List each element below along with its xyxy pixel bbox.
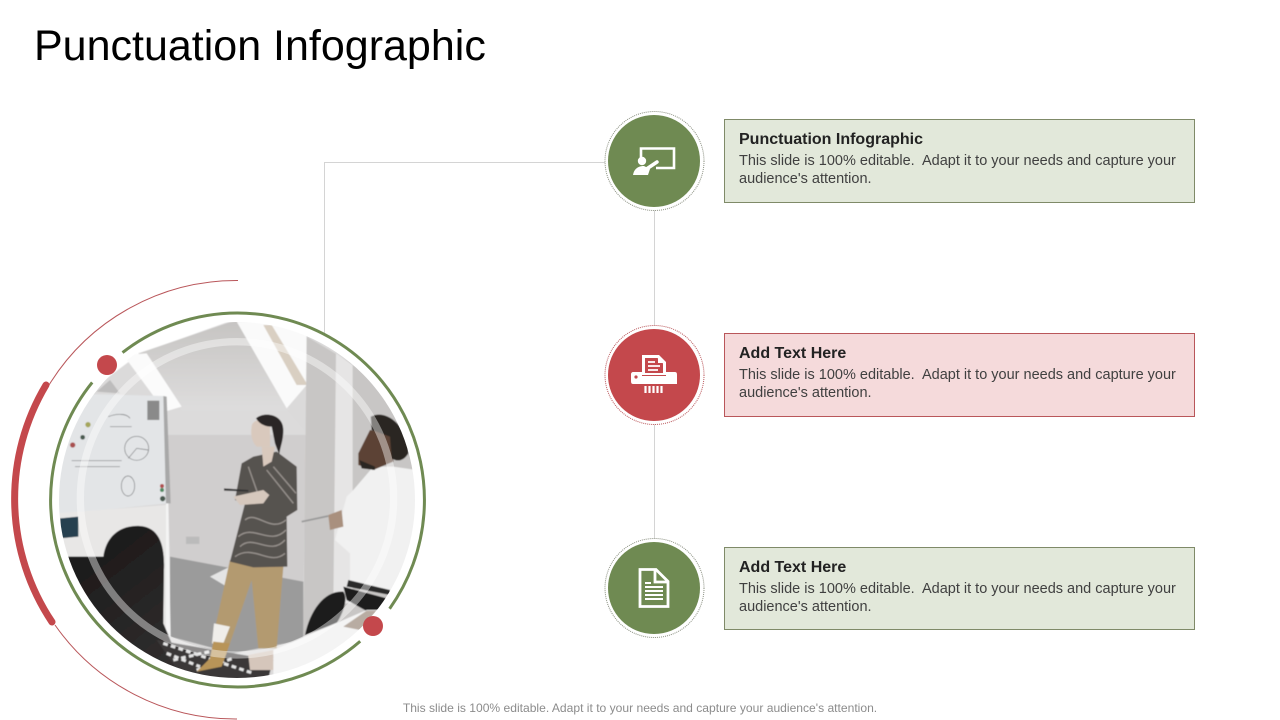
icon: teacher at board [633, 148, 674, 175]
panel: item 1 [724, 119, 1195, 203]
room background [94, 322, 349, 675]
icon: document [640, 570, 668, 606]
plaid sleeve [163, 643, 253, 673]
seated woman [67, 526, 273, 687]
whiteboard [57, 393, 166, 515]
text: item 2: This slide is 100% editable. Adapt it to your needs and capture your audience's attention. [739, 367, 1176, 401]
white sweater [335, 467, 417, 595]
heading: item 2: Add Text Here [739, 345, 846, 362]
text: item 3: This slide is 100% editable. Adapt it to your needs and capture your audience's attention. [739, 581, 1176, 615]
panel: item 2 [724, 333, 1195, 417]
red thin outer arc [49, 280, 238, 719]
foreground papers [273, 609, 378, 674]
red thick arc [15, 385, 52, 622]
text: item 1: This slide is 100% editable. Adapt it to your needs and capture your audience's attention. [739, 153, 1176, 187]
title: Punctuation Infographic [34, 22, 486, 70]
connector lines [324, 162, 654, 542]
arm and pen [328, 510, 343, 530]
heading: item 3: Add Text Here [739, 559, 846, 576]
red dot lower [363, 616, 383, 636]
green ring: upper arc [122, 313, 424, 609]
hands and tablet [233, 490, 269, 505]
step 1 circle with icon [605, 112, 704, 210]
standing woman [197, 415, 297, 672]
standing man [302, 415, 417, 617]
trousers [212, 560, 283, 648]
diagram graphics [11, 111, 704, 720]
step 2 circle with icon [605, 326, 704, 424]
heading: item 1: Punctuation Infographic [739, 131, 923, 148]
red dot upper [97, 355, 117, 375]
jacket [230, 452, 297, 567]
icon: paper shredder [631, 355, 677, 393]
neck and head [262, 447, 275, 467]
skylights [237, 322, 307, 408]
panel: item 3 [724, 547, 1195, 630]
pillar and right wall [303, 337, 420, 637]
photo: presentation in meeting room [50, 313, 423, 687]
translucent inner ring [80, 342, 394, 655]
step 3 circle with icon [605, 538, 704, 638]
chair [305, 592, 345, 635]
footer note: This slide is 100% editable. Adapt it to your needs and capture your audience's attention. [403, 701, 877, 715]
face and hair [358, 430, 393, 470]
green ring: lower arc [51, 382, 360, 687]
